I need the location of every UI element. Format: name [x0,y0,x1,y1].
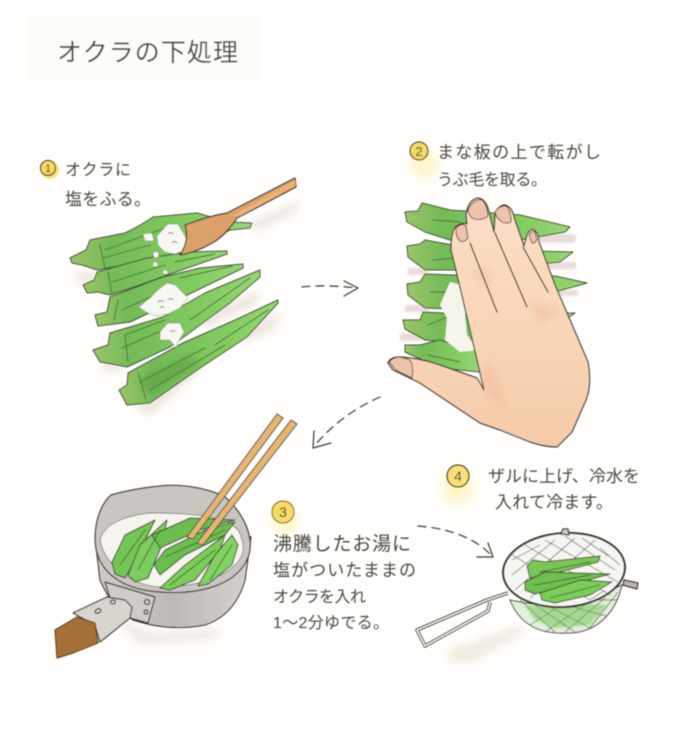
okra row 4 [403,312,575,345]
wooden handle end [55,617,98,658]
step 2 text [437,143,601,189]
step 1 text: 塩をふる。 [65,190,151,209]
wire mesh [501,529,627,611]
step 3 text [273,533,416,632]
step 2 text: うぶ毛を取る。 [437,171,547,189]
step 4: cooling in strainer [417,465,640,664]
step 3 text: 塩がついたままの [273,561,416,580]
okra row 3 [407,274,587,310]
title block [28,14,260,80]
step 3 text: 沸騰したお湯に [273,533,411,555]
hand [388,198,590,447]
step 4 number badge [444,465,472,502]
okra row 1 [405,203,570,240]
okra shadows [75,200,300,416]
step 1 text [65,161,151,209]
pan shadow [105,610,220,645]
step 1 number badge [40,160,59,179]
step 2 number badge [410,142,439,179]
handle bracket [105,582,155,623]
step 1 number badge: 1 [45,163,51,175]
strainer shadow [448,625,525,664]
step 3 number badge [271,501,299,534]
okra shadows [400,234,578,341]
step 1: salting the okra [40,160,300,416]
okra under hand [403,203,587,372]
rim [501,529,627,611]
rubbed salt [440,282,478,352]
arrow: step 1 to step 2 [302,281,358,296]
okra in pan [112,518,238,590]
step 4 number badge: 4 [454,468,462,484]
okra 2 [83,251,227,295]
fingernails [389,200,537,378]
title: オクラの下処理 [57,39,238,67]
okra 5 [119,300,278,405]
step 3 number badge: 3 [279,504,287,520]
okra row 2 [407,240,573,270]
handle [417,593,508,646]
side hook [623,580,638,589]
metal handle [73,597,132,642]
basket [510,585,622,633]
okra row 5 [405,340,480,372]
step 2 number badge: 2 [415,144,423,159]
step 1 text: オクラに [65,161,131,179]
step 4 text: ザルに上げ、冷水を [488,467,640,486]
okra 3 [95,264,243,326]
arrow: step 3 to step 4 [418,526,493,557]
salt piles [139,224,190,348]
step 2: rolling on cutting board [388,142,601,447]
step 4 text: 入れて冷ます。 [495,493,613,512]
okra 4 [93,270,260,367]
step 3: boiling [55,414,416,658]
wooden spoon [180,178,296,255]
strainer [417,529,638,646]
arrow: step 2 to step 3 [313,397,380,448]
step 3 text: 1〜2分ゆでる。 [273,614,389,632]
okra 1 [70,213,252,270]
saucepan [55,485,251,658]
finger creases [470,233,548,312]
chopsticks [187,414,297,545]
step 2 text: まな板の上で転がし [437,143,601,162]
step 3 text: オクラを入れ [273,588,366,606]
top knob [561,529,569,535]
cooled okra [525,556,612,603]
step 4 text [488,467,640,512]
